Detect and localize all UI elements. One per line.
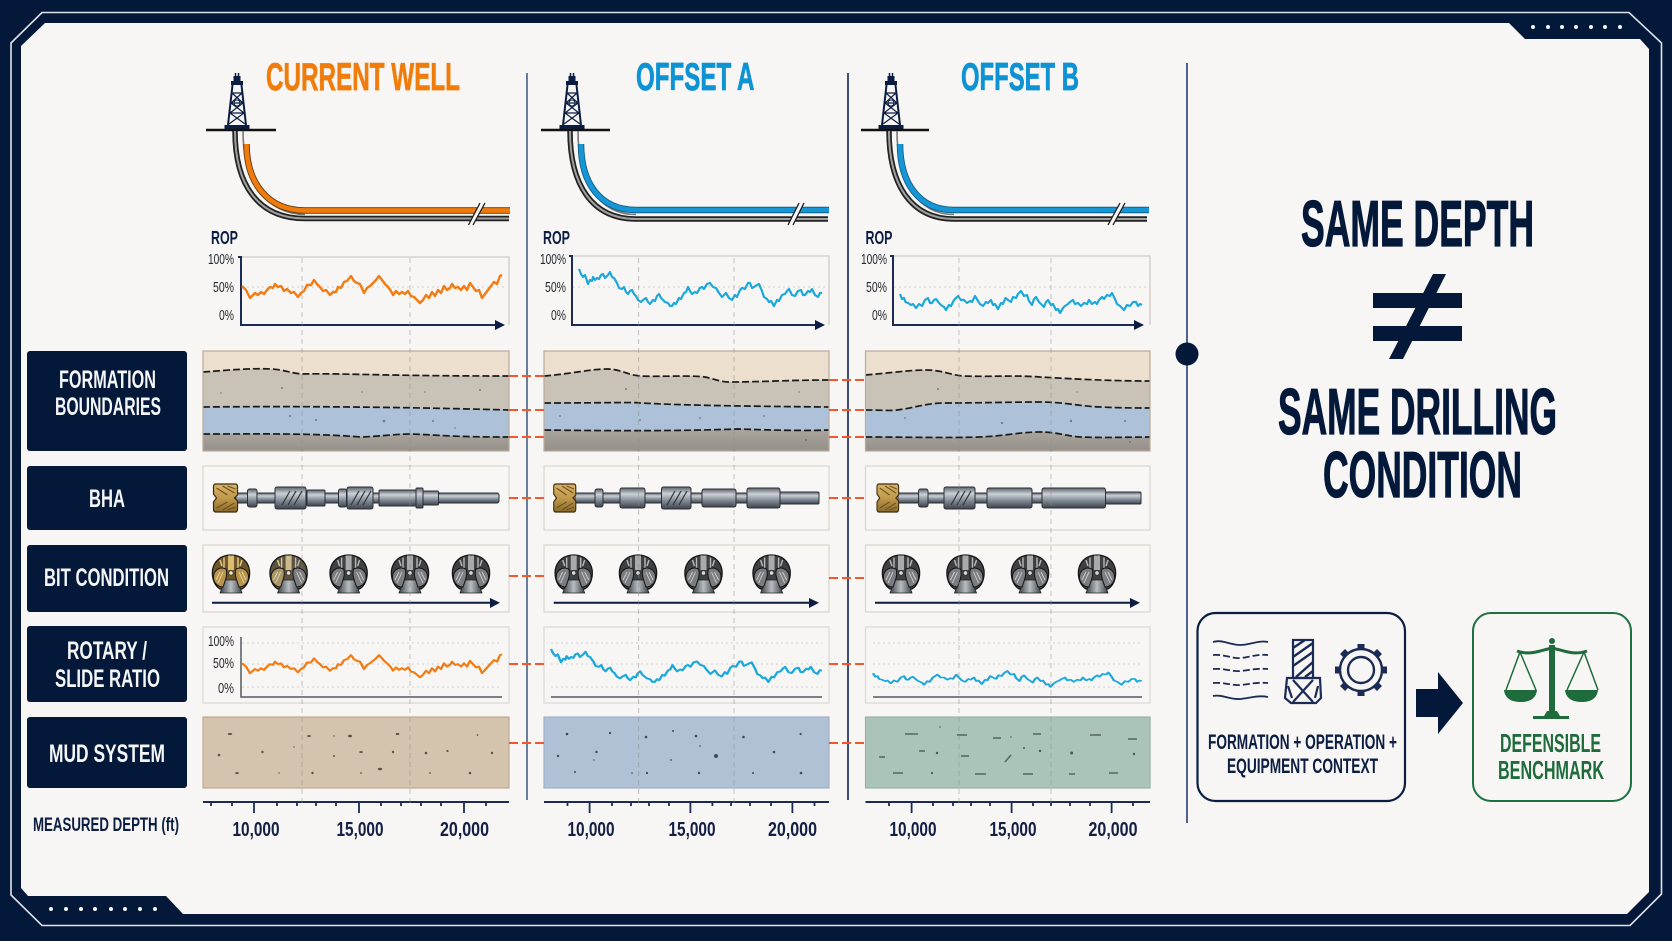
row label: mud system	[27, 717, 187, 788]
depth axis A	[544, 802, 829, 841]
main divider with node	[1176, 63, 1198, 823]
row label: bit condition	[27, 545, 187, 612]
column divider 1	[526, 73, 528, 800]
row label: bit condition: BIT CONDITION	[44, 564, 169, 592]
headline: same drilling condition	[1278, 375, 1557, 511]
chart: ROP offset A: ROP	[543, 228, 570, 248]
panel: offset B column	[861, 56, 1150, 841]
chart: ROP current well: 0%	[219, 308, 234, 324]
icon: drill bit	[1285, 640, 1321, 703]
chart: rotary slide ratio current well: 0%	[218, 681, 234, 697]
depth gridlines current well	[302, 258, 410, 807]
depth axis B	[866, 802, 1150, 841]
chart: ROP offset A	[540, 228, 829, 330]
chart: ROP current well	[208, 228, 509, 330]
chart: ROP offset A: 50%	[545, 280, 566, 296]
chart: ROP offset B: 50%	[866, 280, 887, 296]
depth axis B: 15,000	[990, 819, 1036, 841]
mud sample panel	[203, 717, 509, 788]
chart: ROP offset B: 0%	[872, 308, 887, 324]
caption: context: FORMATION + OPERATION +	[1208, 731, 1397, 754]
arrow: context to benchmark	[1416, 672, 1463, 734]
chart: rotary slide ratio A	[544, 627, 829, 703]
BHA assembly B	[866, 466, 1150, 530]
depth axis current well	[203, 802, 509, 841]
depth gridlines B	[959, 258, 1051, 807]
bit wear sequence	[203, 545, 509, 612]
chart: ROP current well: 100%	[208, 252, 234, 268]
chart: rotary slide ratio current well: 50%	[213, 656, 234, 672]
row label: rotary slide ratio	[27, 626, 187, 702]
panel: defensible benchmark	[1473, 613, 1631, 801]
depth axis A: 15,000	[668, 819, 716, 841]
caption: benchmark: DEFENSIBLE	[1500, 728, 1601, 758]
BHA assembly A	[544, 466, 829, 530]
row label: formation boundaries: FORMATION	[59, 366, 156, 394]
chart: ROP offset A: 0%	[551, 308, 566, 324]
heading: offset B: OFFSET B	[961, 56, 1079, 99]
red dashed connectors between wells	[509, 376, 865, 743]
panel: offset A column	[540, 56, 829, 841]
icon: derrick and wellbore A	[541, 73, 829, 225]
depth axis current well: 10,000	[232, 819, 280, 841]
depth axis current well: 15,000	[336, 819, 384, 841]
depth axis B: 20,000	[1088, 819, 1138, 841]
bit wear sequence B	[866, 545, 1150, 612]
chart: rotary slide ratio current well: 100%	[208, 634, 234, 650]
row label: formation boundaries	[27, 351, 187, 451]
chart: rotary slide ratio B	[866, 627, 1150, 703]
row label: formation boundaries: BOUNDARIES	[55, 393, 161, 421]
caption: context: EQUIPMENT CONTEXT	[1227, 755, 1378, 778]
chart: rotary slide ratio current well	[203, 627, 509, 703]
row label: mud system: MUD SYSTEM	[49, 740, 165, 768]
row label: BHA	[27, 466, 187, 530]
BHA assembly	[203, 466, 509, 530]
decorative dots bottom left	[49, 907, 157, 911]
chart: ROP offset B: 100%	[861, 252, 887, 268]
mud sample panel B	[866, 717, 1150, 788]
chart: ROP current well: ROP	[211, 228, 238, 248]
mud sample panel A	[544, 717, 829, 788]
row label: rotary slide ratio: SLIDE RATIO	[55, 665, 160, 693]
heading: current well: CURRENT WELL	[266, 56, 460, 99]
depth gridlines A	[639, 258, 734, 807]
panel: context box	[1198, 613, 1405, 801]
icon: derrick and wellbore B	[861, 73, 1149, 225]
caption: benchmark: BENCHMARK	[1498, 755, 1604, 785]
icon: derrick and wellbore	[206, 73, 510, 225]
caption: benchmark	[1498, 728, 1604, 785]
bit wear sequence A	[544, 545, 829, 612]
column divider 2	[847, 73, 849, 800]
icon: formation layers	[1213, 641, 1268, 699]
chart: ROP offset A: 100%	[540, 252, 566, 268]
formation bands B	[866, 351, 1150, 451]
icon: balance scales	[1504, 638, 1598, 719]
row label: BHA: BHA	[89, 485, 125, 513]
caption: context	[1208, 731, 1397, 778]
depth axis A: 20,000	[768, 819, 817, 841]
heading: offset A: OFFSET A	[636, 56, 754, 99]
icon: gear	[1335, 644, 1387, 696]
row label: rotary slide ratio: ROTARY /	[67, 637, 147, 665]
depth axis A: 10,000	[568, 819, 614, 841]
depth axis current well: 20,000	[440, 819, 489, 841]
chart: ROP current well: 50%	[213, 280, 234, 296]
chart: ROP offset B: ROP	[866, 228, 892, 248]
axis title: measured depth: MEASURED DEPTH (ft)	[33, 815, 179, 836]
formation bands A	[544, 351, 829, 451]
panel: current well column	[203, 56, 510, 841]
depth axis B: 10,000	[890, 819, 936, 841]
decorative dots top right	[1531, 25, 1622, 29]
icon: not equal sign	[1373, 274, 1462, 359]
chart: ROP offset B	[861, 228, 1150, 330]
formation bands	[203, 351, 509, 451]
